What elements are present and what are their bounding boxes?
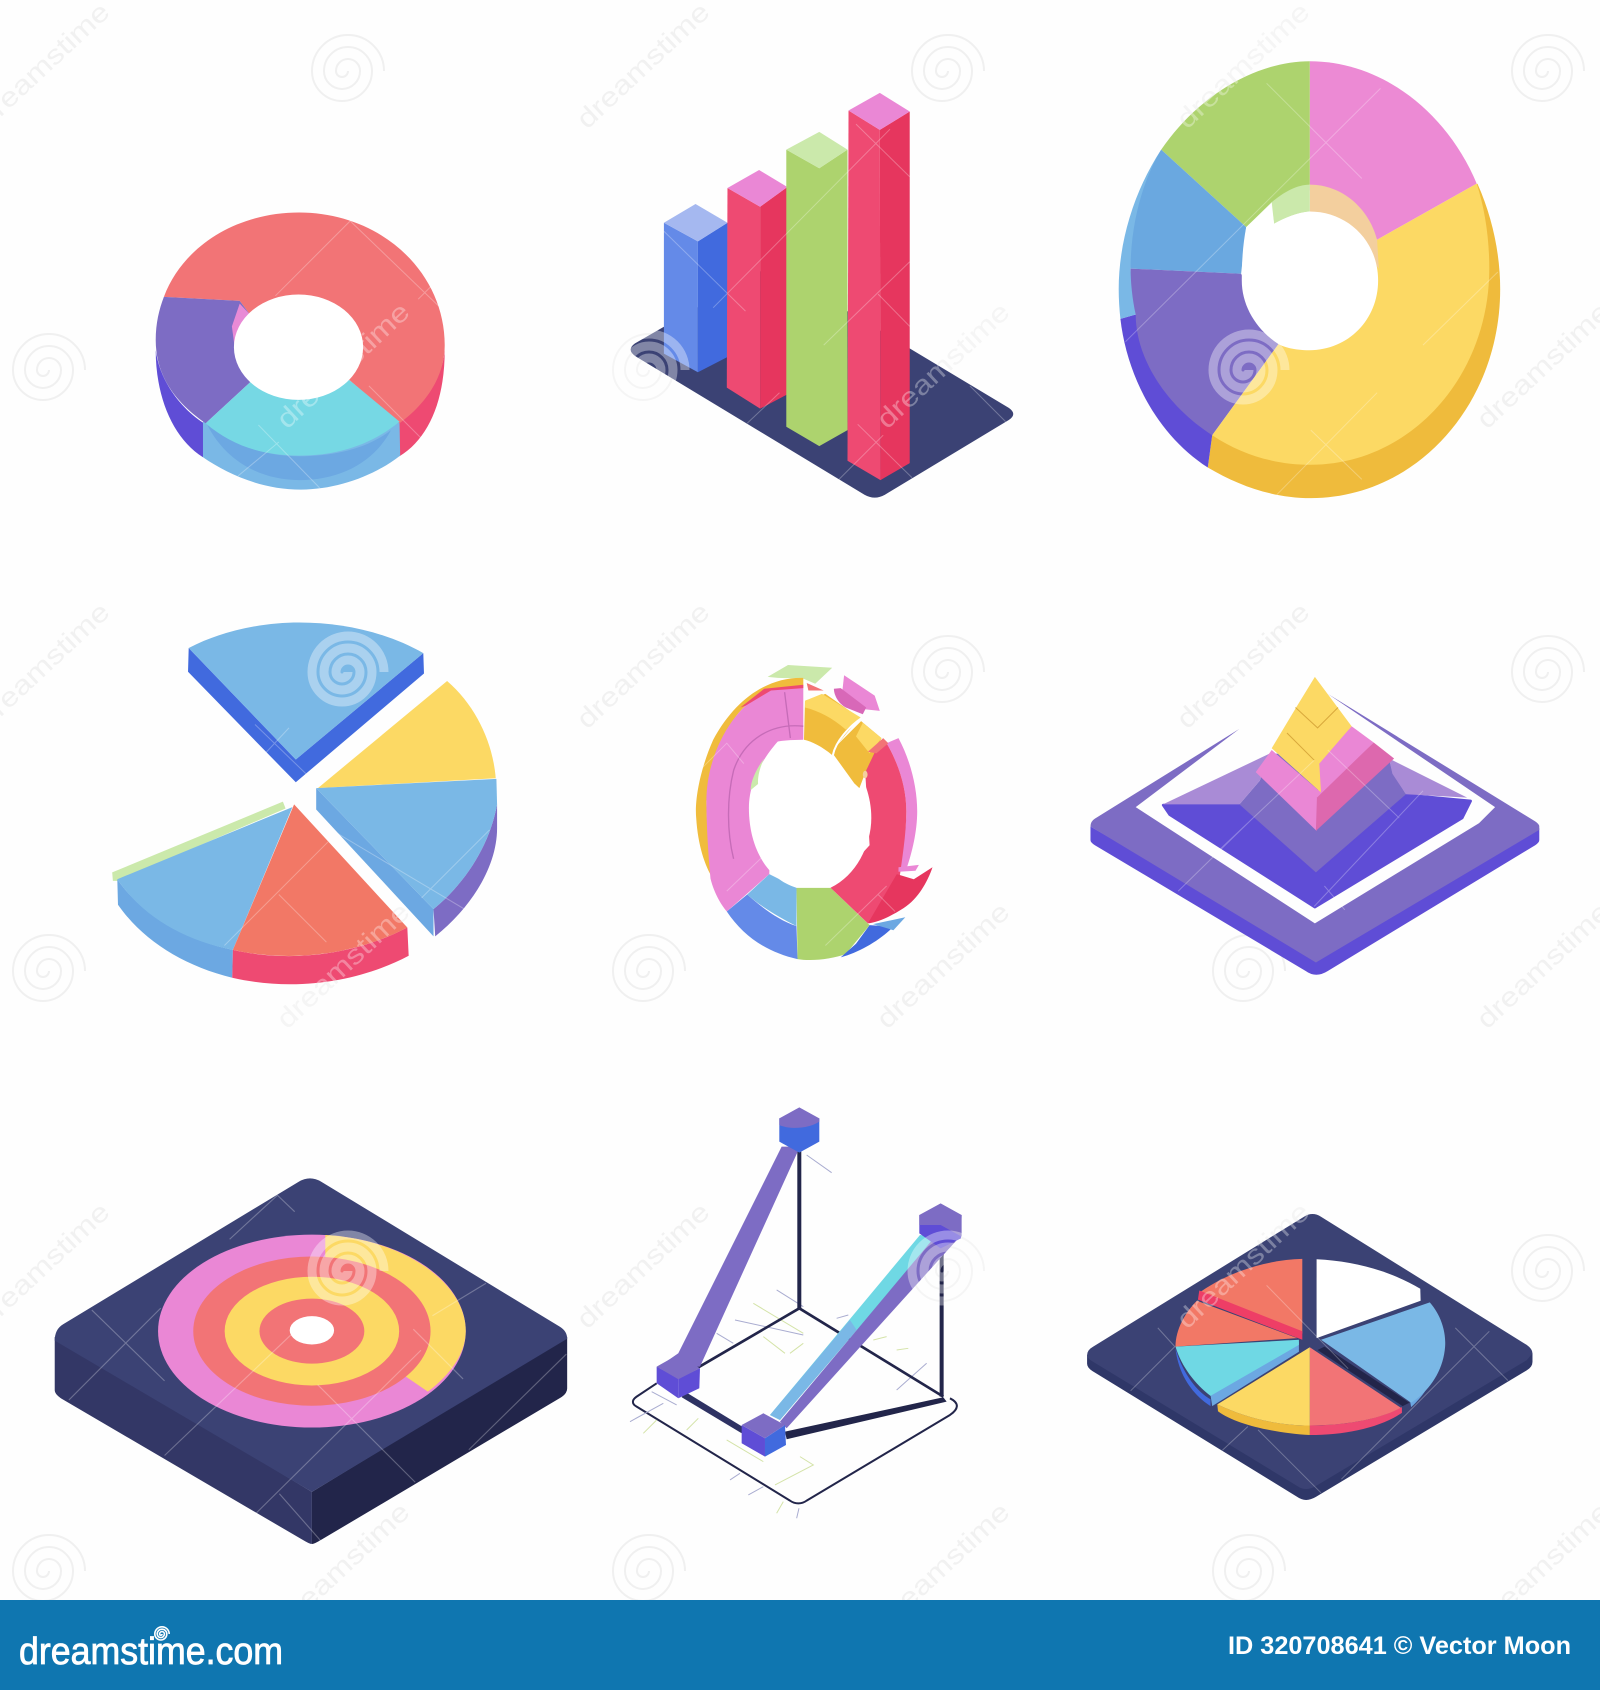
chart: fragmented multicolour ring [696,665,932,960]
platform side [1090,826,1539,975]
slice: salmon split [1175,1259,1302,1347]
floor axes [697,1308,943,1397]
slice: top blue [188,622,424,782]
slice: yellow [318,681,496,788]
slice: right blue [316,779,497,936]
grid ticks [643,1303,908,1513]
watermark layer: faint spirals and wordmarks on the background: dreamstime [1171,1197,1315,1334]
chart: isometric donut, red, purple and teal [156,212,445,490]
chart: isometric line graph with cube nodes [630,1107,962,1518]
plate side [1087,1353,1532,1500]
block left side [55,1337,312,1544]
bar: red [727,170,787,409]
node: top right cube [919,1203,962,1248]
chart: large tilted donut with yellow segment [1119,61,1500,498]
watermark layer: faint spirals and wordmarks on the background: dreamstime [1471,897,1600,1034]
base plate [631,265,1013,498]
pyramid tier: yellow tip [1272,677,1352,792]
watermark layer: faint spirals and wordmarks on the background: dreamstime [871,897,1015,1034]
slice: lower red [232,804,409,984]
watermark overlay: translucent spirals and wordmarks over the charts: dreamstime [871,297,1015,434]
chart: isometric layered pyramid on purple platform [1090,677,1539,975]
platform top frame [1090,694,1539,962]
target rings [158,1235,466,1428]
watermark overlay: translucent spirals and wordmarks over the charts: dreamstime [1171,0,1315,134]
slice: lower left blue with green edge [112,802,292,978]
watermark layer: faint spirals and wordmarks on the background: dreamstime [271,1497,415,1634]
watermark layer: faint spirals and wordmarks on the background: dreamstime [871,297,1015,434]
chart: isometric bar chart on dark base [631,93,1013,498]
slice: blue [1318,1302,1445,1407]
footer credit: ID 320708641 © Vector Moon [1228,1632,1571,1660]
pyramid tier: bottom [1163,795,1471,907]
icon: logo spiral [155,1627,169,1640]
watermark layer: faint spirals and wordmarks on the background: dreamstime [271,297,415,434]
block top [55,1178,567,1492]
slice: yellow [1217,1347,1310,1435]
watermark layer: faint spirals and wordmarks on the background: dreamstime [571,0,715,134]
watermark overlay: translucent spirals and wordmarks over the charts: dreamstime [271,897,415,1034]
watermark layer: faint spirals and wordmarks on the background: dreamstime [1471,297,1600,434]
footer logo: dreamstime.com: dreamstime.com [19,1631,283,1673]
bar: green [786,132,848,446]
watermark layer: faint spirals and wordmarks on the background: dreamstime [1171,0,1315,134]
node: lower centre cube [742,1413,786,1457]
line segment: purple [657,1147,800,1368]
node: top left cube [779,1107,819,1153]
footer band [0,1600,1600,1690]
watermark layer: faint spirals and wordmarks on the background: dreamstime [1471,1497,1600,1634]
chart: target rings on dark isometric block [55,1178,567,1544]
watermark overlay: translucent spirals and wordmarks over the charts [271,0,1315,1334]
vertical axes [799,1152,942,1397]
slice: red [1310,1347,1402,1435]
pyramid tier: pink [1256,726,1394,831]
watermark overlay: translucent spirals and wordmarks over the charts: dreamstime [1171,1197,1315,1334]
watermark layer: faint spirals and wordmarks on the background: dreamstime [571,597,715,734]
bar: tall red [848,93,910,480]
chart: exploded pie on dark isometric plate [1087,1214,1532,1500]
bar: blue [664,204,727,372]
watermark layer: faint spirals and wordmarks on the background: dreamstime [871,1497,1015,1634]
watermark layer: faint spirals and wordmarks on the background: dreamstime [1171,597,1315,734]
plate top [1087,1214,1532,1489]
watermark layer: faint spirals and wordmarks on the background: dreamstime [271,897,415,1034]
node: lower left cube [657,1355,700,1398]
watermark layer: faint spirals and wordmarks on the background: dreamstime [571,1197,715,1334]
block right side [312,1337,567,1544]
floor outline [633,1383,957,1503]
line segment: cyan and purple [770,1235,958,1428]
slice: teal [1175,1340,1299,1406]
slice: white [1317,1259,1421,1338]
pyramid tier: middle [1163,753,1467,872]
chart: exploded pie with separated slices [112,622,497,984]
watermark overlay: translucent spirals and wordmarks over the charts: dreamstime [271,297,415,434]
